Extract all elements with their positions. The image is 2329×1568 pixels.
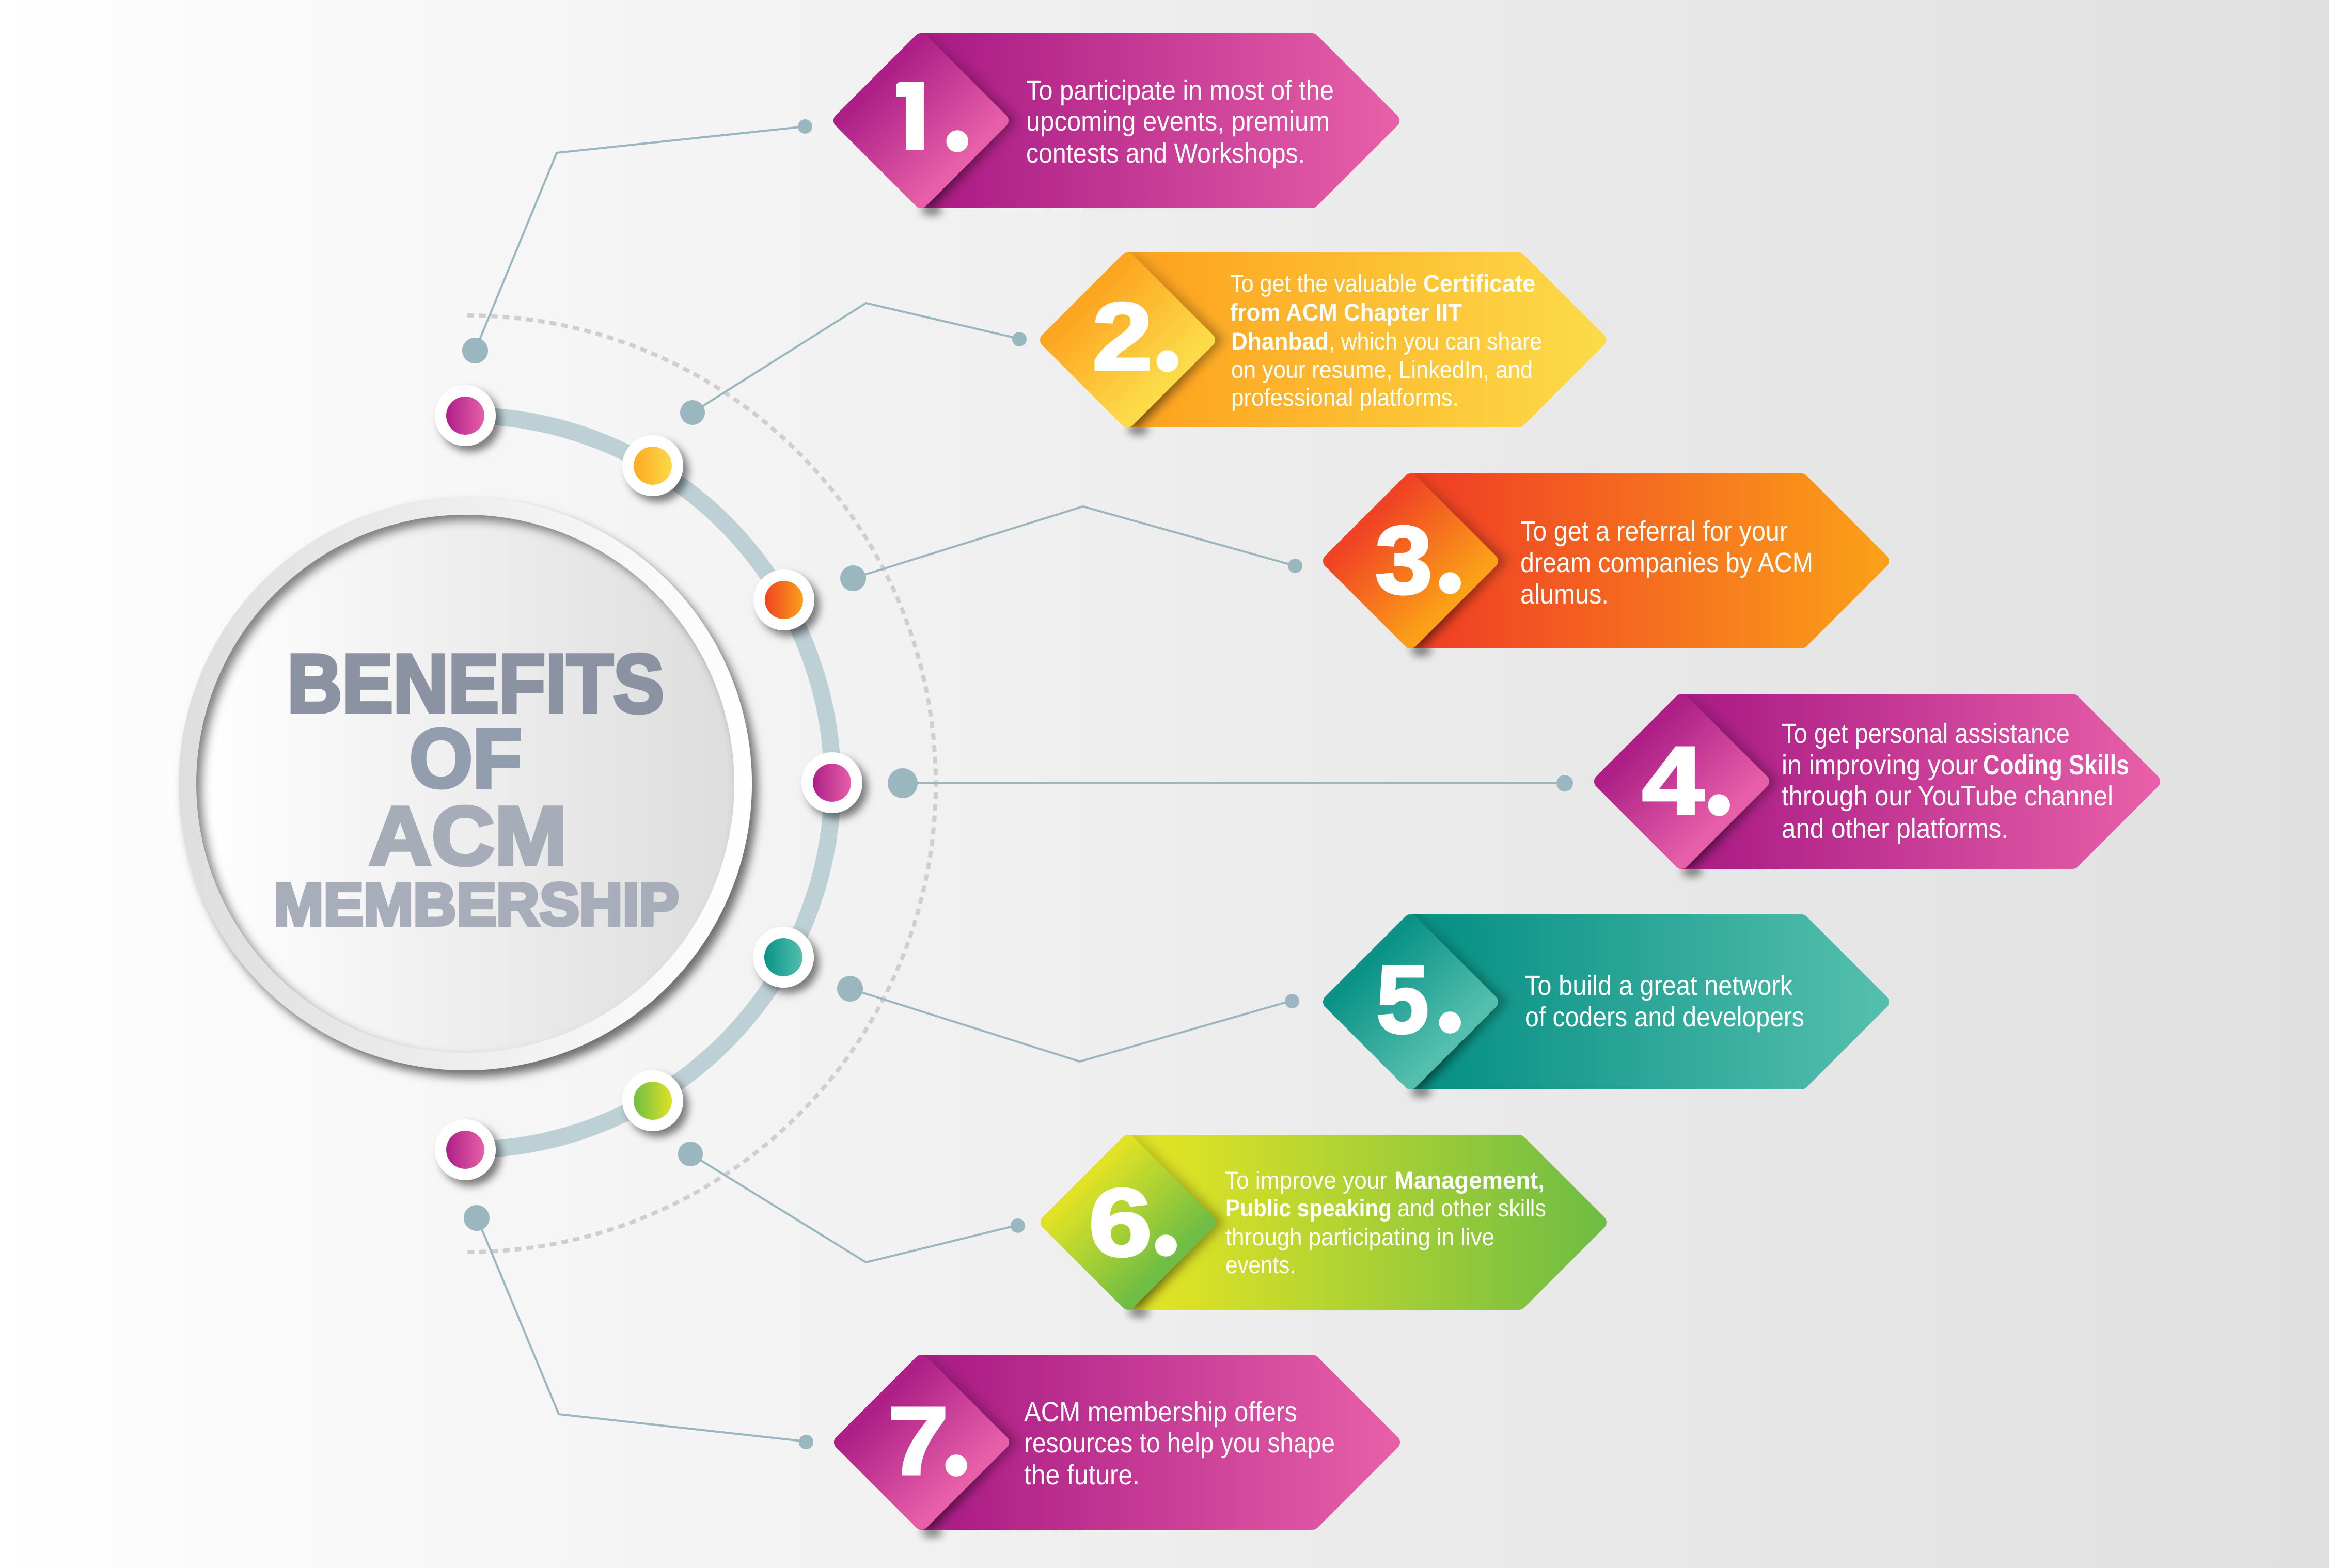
number 4: . — [1702, 694, 1736, 844]
text 4: To get personal assistance — [1782, 718, 2070, 749]
title: ACM — [369, 790, 567, 883]
text 1: upcoming events, premium — [1026, 106, 1330, 137]
number 1: 1 — [885, 64, 938, 170]
title: BENEFITS — [287, 637, 664, 730]
number 5: 5 — [1376, 946, 1429, 1053]
text 3: To get a referral for your — [1520, 516, 1788, 547]
text 2: Dhanbad — [1231, 327, 1329, 355]
panel: benefit 4 — [1594, 691, 2153, 877]
central circle — [179, 497, 752, 1070]
title: OF — [410, 712, 522, 805]
number 2 — [1092, 250, 1185, 400]
text 2: from ACM Chapter IIT — [1230, 298, 1462, 326]
number 3: . — [1433, 472, 1467, 622]
number 1: . — [940, 30, 974, 180]
text 5: of coders and developers — [1525, 1002, 1804, 1033]
panel: benefit 3 — [1323, 470, 1882, 656]
connector 7 — [464, 1205, 813, 1449]
connector 3 — [840, 506, 1302, 591]
text 4: and other platforms. — [1782, 813, 2008, 844]
outer ring — [179, 497, 752, 1070]
text 1: contests and Workshops. — [1026, 138, 1305, 169]
text 6 — [1225, 1166, 1546, 1278]
text 2: , which you can share — [1329, 327, 1542, 355]
number 6: . — [1149, 1134, 1183, 1284]
text 5: To build a great network — [1525, 970, 1793, 1001]
panel: benefit 7 — [834, 1352, 1393, 1538]
text 7: the future. — [1024, 1460, 1140, 1491]
node 1 — [435, 385, 496, 446]
text 6: Public speaking — [1225, 1194, 1392, 1222]
node 7 — [435, 1119, 496, 1180]
text 3: alumus. — [1520, 579, 1609, 610]
number 4 — [1642, 694, 1736, 844]
text 4 — [1782, 718, 2129, 844]
number 7 — [888, 1354, 973, 1504]
text 4: through our YouTube channel — [1782, 781, 2113, 812]
text 3 — [1520, 516, 1813, 610]
node 3 — [753, 569, 814, 630]
number 1 — [896, 82, 968, 152]
node 5 — [753, 927, 814, 988]
number 5: . — [1433, 911, 1467, 1061]
number 7: . — [939, 1354, 973, 1504]
node 6 — [622, 1070, 683, 1131]
text 2: To get the valuable — [1230, 270, 1417, 297]
text 6: through participating in live — [1225, 1223, 1494, 1250]
number 5 — [1376, 911, 1467, 1061]
connector 1 — [462, 119, 812, 363]
connector 5 — [837, 976, 1299, 1062]
text 7: resources to help you shape — [1024, 1428, 1335, 1459]
panel: benefit 1 — [833, 30, 1392, 216]
text 3: dream companies by ACM — [1520, 547, 1813, 578]
title — [274, 637, 679, 938]
node 4 — [801, 752, 862, 813]
number 6 — [1089, 1134, 1183, 1284]
number 7: 7 — [888, 1388, 949, 1495]
title: MEMBERSHIP — [274, 870, 679, 938]
connector 2 — [680, 303, 1027, 425]
text 5 — [1525, 970, 1804, 1033]
panel: benefit 6 — [1041, 1132, 1599, 1318]
number 6: 6 — [1089, 1169, 1152, 1276]
disc inner shadow — [194, 513, 748, 1066]
text 4: in improving your — [1782, 750, 1978, 781]
text 6: and other skills — [1397, 1194, 1546, 1222]
text 1 — [1026, 75, 1334, 169]
text 2 — [1230, 270, 1542, 411]
text 6: To improve your — [1225, 1166, 1387, 1194]
text 7: ACM membership offers — [1024, 1397, 1297, 1428]
number 4: 4 — [1642, 727, 1704, 834]
text 4: Coding Skills — [1983, 750, 2129, 781]
inner disc — [196, 515, 734, 1053]
number 3: 3 — [1375, 507, 1433, 614]
panel: benefit 2 — [1040, 249, 1599, 435]
text 1: To participate in most of the — [1026, 75, 1334, 106]
timeline arc — [465, 416, 832, 1150]
connector 6 — [678, 1142, 1025, 1262]
number 2: 2 — [1092, 283, 1153, 390]
text 6: events. — [1225, 1251, 1296, 1278]
text 2: Certificate — [1423, 270, 1535, 297]
text 6: Management, — [1394, 1166, 1545, 1194]
number 2: . — [1151, 250, 1185, 400]
node 2 — [622, 435, 683, 496]
connector 4 — [888, 768, 1573, 798]
text 2: professional platforms. — [1231, 384, 1459, 411]
text 7 — [1024, 1397, 1335, 1491]
dashed outer arc — [467, 315, 936, 1252]
number 3 — [1375, 472, 1467, 622]
text 2: on your resume, LinkedIn, and — [1231, 356, 1533, 383]
panel: benefit 5 — [1323, 911, 1882, 1097]
